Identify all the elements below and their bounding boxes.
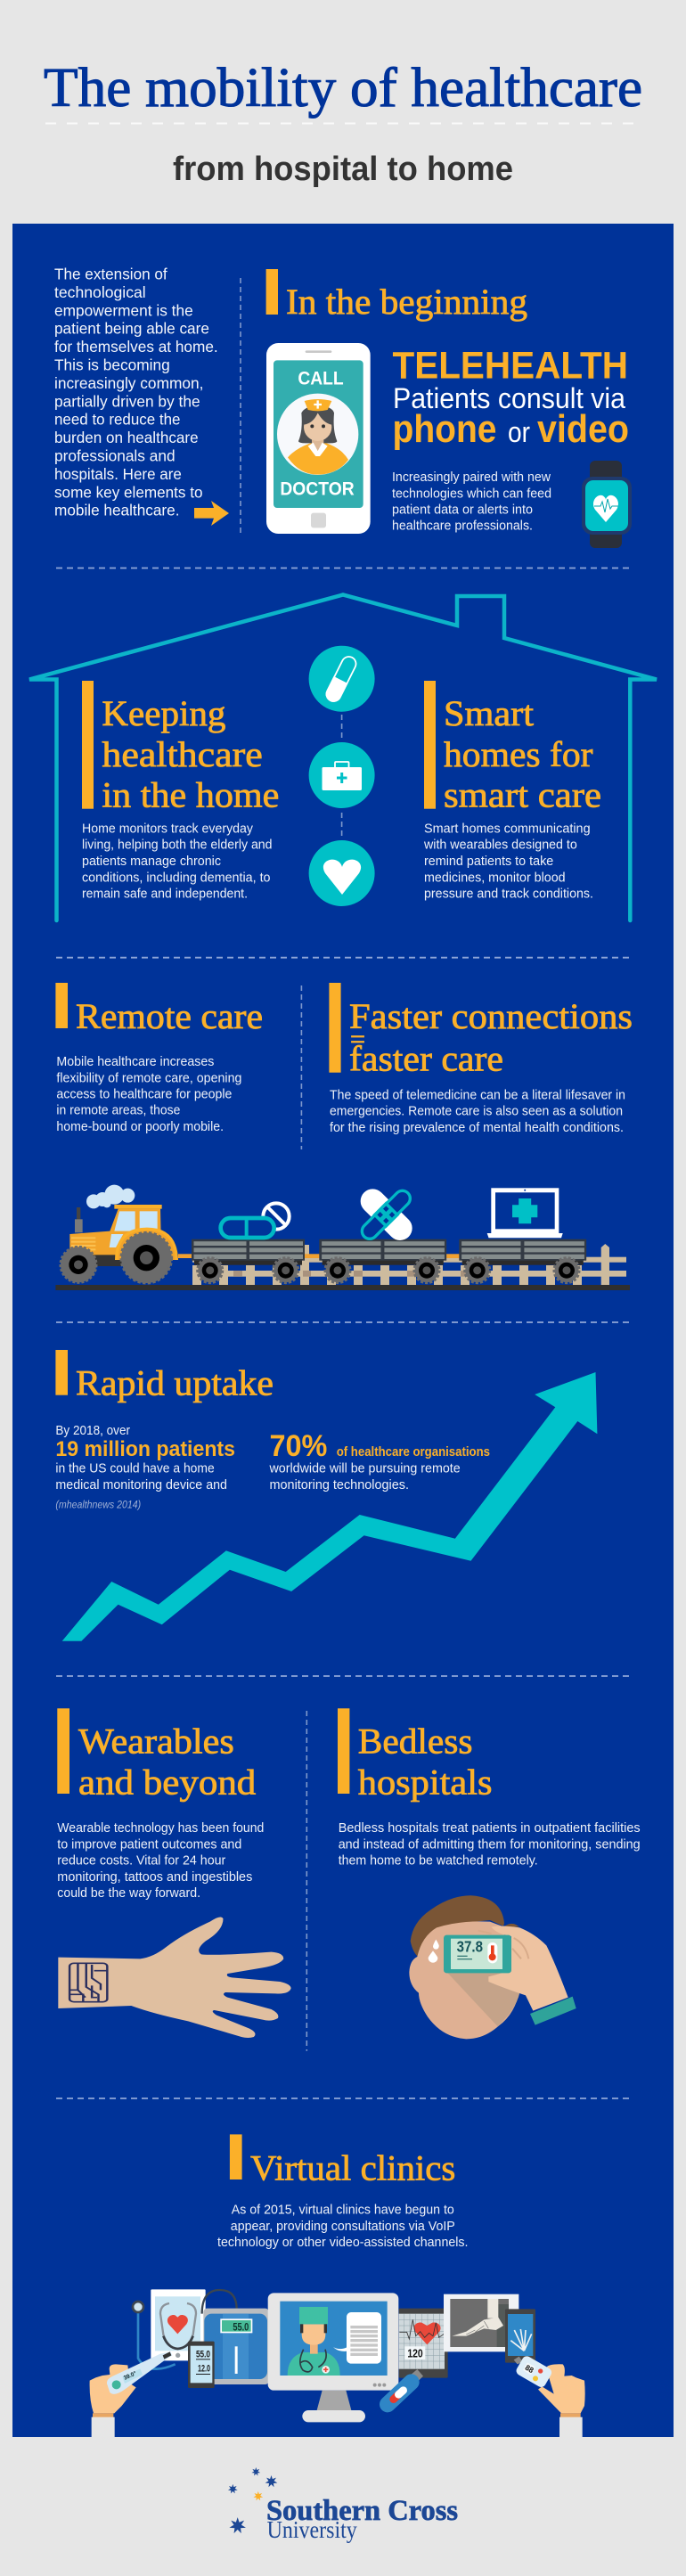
stat: 19 million patients: 19 million patients: [55, 1437, 235, 1461]
text: speed of telemedicine: [330, 1087, 625, 1135]
intro text: hospitals. Here are: [54, 465, 182, 483]
ground: [55, 1285, 630, 1290]
text: smart homes: remind patients to take: [424, 854, 553, 869]
arrow: yellow: [194, 501, 229, 526]
chart arrow: rising trend: [62, 1372, 597, 1641]
heading: faster connections = faster care: faster care: [349, 1039, 503, 1079]
stat: 19 million patients: (mhealthnews 2014): [55, 1499, 141, 1511]
text: virtual clinics: technology or other video-assisted channels.: [217, 2235, 469, 2250]
blood pressure monitor: 55.0: [233, 2320, 249, 2333]
subtitle: from hospital to home: [173, 151, 513, 188]
phone x-ray hand: [505, 2309, 535, 2363]
heading: virtual clinics: Virtual clinics: [250, 2147, 455, 2188]
telehealth block: TELEHEALTH: [392, 344, 628, 387]
heading: smart homes for smart care: [424, 681, 601, 815]
intro text: some key elements to: [54, 483, 203, 501]
text: home monitors: [82, 822, 273, 901]
title: The mobility of healthcare: [44, 58, 642, 119]
text: virtual clinics: [217, 2203, 469, 2250]
telehealth block: phone: [392, 407, 497, 451]
text: speed of telemedicine: The speed of telemedicine can be a literal lifesaver in: [330, 1087, 625, 1102]
text: speed of telemedicine: emergencies. Remote care is also seen as a solution: [330, 1104, 623, 1119]
heading: keeping healthcare in the home: Keeping: [102, 693, 225, 733]
text: speed of telemedicine: for the rising prevalence of mental health conditions.: [330, 1120, 624, 1135]
illustration: tractor pulling trailers: [55, 1185, 630, 1290]
text: bedless: [339, 1820, 641, 1869]
intro text: need to reduce the: [54, 411, 180, 429]
monitor with doctor: [268, 2293, 398, 2422]
text: smart homes: Smart homes communicating: [424, 822, 591, 837]
text: bedless: Bedless hospitals treat patients in outpatient facilities: [339, 1820, 641, 1836]
text: smart homes: pressure and track conditions.: [424, 886, 593, 901]
text: wearables: [57, 1820, 264, 1901]
logo: Southern Cross University: [228, 2467, 458, 2543]
text: wearables: Wearable technology has been found: [57, 1820, 264, 1836]
intro text: partially driven by the: [54, 392, 200, 410]
cargo: pills: [221, 1203, 290, 1238]
icon: phone with nurse: DOCTOR: [280, 478, 355, 500]
heading: faster connections = faster care: [329, 983, 633, 1079]
text: virtual clinics: appear, providing consultations via VoIP: [231, 2219, 455, 2234]
heading: In the beginning: In the beginning: [286, 282, 527, 322]
heading: In the beginning: [266, 269, 527, 322]
heading: bedless hospitals: [338, 1708, 492, 1802]
stat: 19 million patients: By 2018, over: [55, 1423, 130, 1438]
intro text: The extension of: [54, 266, 167, 283]
intro text: patient being able care: [54, 320, 209, 338]
right hand with glucose meter: 88: [524, 2363, 535, 2375]
heading: faster connections = faster care: Faster connections: [349, 996, 633, 1036]
heading: keeping healthcare in the home: in the home: [102, 775, 279, 815]
heading: smart homes for smart care: homes for: [444, 734, 593, 774]
stat: 70 percent: monitoring technologies.: [269, 1477, 409, 1492]
heading: rapid uptake: [55, 1350, 274, 1403]
illustration: hand with circuit tattoo: [58, 1917, 291, 2038]
text: home monitors: living, helping both the elderly and: [82, 838, 273, 853]
cargo: laptop: [487, 1188, 563, 1238]
text: wearables: could be the way forward.: [57, 1885, 200, 1901]
illustration: head with forehead thermometer: 37.8: [457, 1938, 483, 1956]
intro text: burden on healthcare: [54, 429, 199, 446]
ECG tablet: [399, 2309, 448, 2378]
text: virtual clinics: As of 2015, virtual clinics have begun to: [232, 2203, 454, 2218]
text: smart homes: [423, 822, 593, 901]
heading: remote care: Remote care: [76, 996, 263, 1036]
heading: keeping healthcare in the home: healthcare: [102, 734, 263, 774]
heading: rapid uptake: Rapid uptake: [76, 1363, 274, 1403]
icon: heart: [309, 840, 375, 906]
icon: phone with nurse: [266, 343, 371, 534]
text: increasingly paired: healthcare professionals.: [392, 519, 533, 534]
ECG tablet: 120: [407, 2348, 423, 2360]
heading: wearables and beyond: Wearables: [78, 1721, 234, 1761]
text: remote care: home-bound or poorly mobile.: [56, 1119, 224, 1134]
intro text: This is becoming: [54, 356, 170, 374]
text: wearables: to improve patient outcomes and: [57, 1836, 241, 1852]
illustration: virtual clinic devices, left group: [90, 2289, 398, 2437]
intro text: increasingly common,: [54, 374, 203, 392]
intro text: mobile healthcare.: [54, 502, 180, 519]
phone readout: 12.0: [198, 2363, 210, 2374]
intro text: [54, 266, 218, 519]
text: bedless: and instead of admitting them for monitoring, sending: [339, 1836, 641, 1852]
telehealth block: video: [537, 407, 629, 451]
illustration: head with forehead thermometer: [409, 1895, 576, 2039]
heading: wearables and beyond: and beyond: [78, 1762, 256, 1802]
heading: keeping healthcare in the home: [82, 681, 279, 815]
text: wearables: reduce costs. Vital for 24 hour: [57, 1853, 225, 1869]
stat: 70 percent: 70%: [269, 1429, 327, 1463]
heading: smart homes for smart care: Smart: [444, 693, 534, 733]
text: home monitors: patients manage chronic: [82, 854, 221, 869]
fence: [192, 1244, 626, 1285]
left hand with thermometer: 39.0°: [123, 2369, 137, 2382]
blood pressure monitor: [202, 2290, 269, 2384]
text: home monitors: conditions, including dementia, to: [82, 870, 271, 885]
text: remote care: flexibility of remote care, opening: [56, 1070, 241, 1085]
telehealth block: Patients consult via: [393, 382, 625, 414]
text: increasingly paired: patient data or alerts into: [392, 503, 533, 517]
stat: 19 million patients: [55, 1423, 235, 1511]
text: smart homes: medicines, monitor blood: [424, 870, 566, 885]
heading: bedless hospitals: hospitals: [358, 1762, 492, 1802]
couplings: [178, 1254, 192, 1258]
icon: medical case: [309, 742, 375, 808]
logo: Southern Cross University: University: [267, 2516, 357, 2543]
USB pill: [388, 2369, 423, 2404]
text: wearables: monitoring, tattoos and ingestibles: [57, 1869, 252, 1885]
illustration: virtual clinic devices, right group: [388, 2294, 585, 2437]
heading: faster connections = faster care: =: [350, 1025, 365, 1054]
intro text: technological: [54, 283, 146, 301]
intro text: professionals and: [54, 447, 176, 465]
heading: smart homes for smart care: smart care: [444, 775, 601, 815]
logo: Southern Cross University: Southern Cross: [266, 2495, 458, 2527]
stat: 70 percent: of healthcare organisations: [337, 1444, 490, 1460]
text: home monitors: remain safe and independent.: [82, 886, 248, 901]
heading: remote care: [55, 983, 263, 1036]
stat: 19 million patients: medical monitoring device and: [55, 1477, 227, 1492]
text: remote care: in remote areas, those: [56, 1103, 180, 1118]
heading: wearables and beyond: [57, 1708, 256, 1802]
stat: 70 percent: worldwide will be pursuing remote: [269, 1461, 461, 1476]
text: home monitors: Home monitors track everyday: [82, 822, 253, 837]
telehealth block: [392, 344, 629, 451]
icon: phone with nurse: CALL: [298, 368, 344, 389]
text: bedless: them home to be watched remotely.: [339, 1853, 538, 1869]
left hand with thermometer: [90, 2351, 172, 2437]
text: increasingly paired: technologies which can feed: [392, 486, 551, 501]
text: smart homes: with wearables designed to: [423, 838, 577, 853]
cargo: bandage: [370, 1198, 403, 1231]
heading: virtual clinics: [230, 2134, 455, 2188]
tablet with stethoscope: [133, 2289, 206, 2369]
stat: 70 percent: [269, 1429, 490, 1492]
text: remote care: access to healthcare for people: [56, 1087, 232, 1102]
trailers: [192, 1239, 305, 1265]
text: remote care: [56, 1054, 241, 1134]
tractor: [61, 1185, 176, 1283]
intro text: for themselves at home.: [54, 338, 218, 356]
right hand with glucose meter: [514, 2354, 585, 2437]
stat: 19 million patients: in the US could have a home: [55, 1461, 215, 1476]
telehealth block: or: [508, 416, 530, 448]
text: remote care: Mobile healthcare increases: [56, 1054, 214, 1069]
phone readout: [188, 2342, 215, 2388]
house outline: [29, 595, 657, 920]
intro text: empowerment is the: [54, 301, 193, 319]
foot x-ray: [444, 2294, 519, 2351]
icon: smartwatch: [582, 461, 632, 548]
text: increasingly paired: [392, 470, 551, 534]
text: increasingly paired: Increasingly paired with new: [392, 470, 551, 485]
icon: capsule: [309, 646, 375, 712]
heading: bedless hospitals: Bedless: [358, 1721, 472, 1761]
phone readout: 55.0: [196, 2349, 210, 2359]
